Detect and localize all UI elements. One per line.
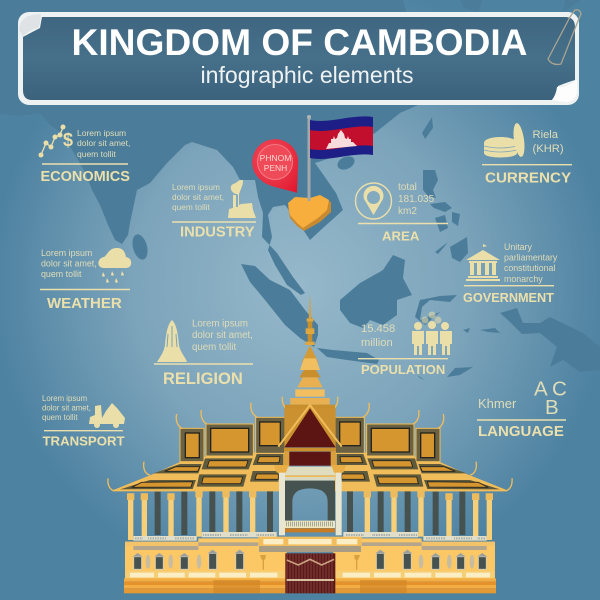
religion <box>154 318 253 388</box>
religion heading: RELIGION <box>163 370 243 388</box>
weather heading: WEATHER <box>47 295 122 312</box>
royal palace <box>108 294 512 593</box>
industry <box>172 180 256 240</box>
bottom right page curl <box>552 79 577 102</box>
population heading: POPULATION <box>361 362 445 377</box>
religion text: dolor sit amet, <box>192 330 253 341</box>
icon: letters A B C: A <box>534 378 548 400</box>
map pin: Phnom Penh <box>252 139 298 193</box>
industry text: quem tollit <box>172 202 211 212</box>
area <box>356 182 448 244</box>
title banner <box>18 10 581 105</box>
economics heading: ECONOMICS <box>40 169 130 185</box>
government text: monarchy <box>504 274 543 284</box>
government text: Unitary <box>504 242 532 252</box>
industry text: Lorem ipsum <box>172 182 220 192</box>
currency heading: CURRENCY <box>485 170 571 186</box>
population <box>358 312 452 377</box>
map of southeast asia <box>0 0 600 380</box>
economics text: dolor sit amet, <box>77 138 130 148</box>
icon: dump truck <box>89 403 125 428</box>
area text: total <box>398 182 417 193</box>
transport heading: TRANSPORT <box>42 434 125 448</box>
government text: parliamentary <box>504 252 558 262</box>
religion text: quem tollit <box>192 342 236 353</box>
map pin: Phnom Penh: PENH <box>264 163 287 173</box>
icon: letters A B C: C <box>552 378 567 400</box>
weather text: dolor sit amet, <box>41 258 97 268</box>
economics text: Lorem ipsum <box>77 128 126 138</box>
transport <box>42 394 125 448</box>
icon: coins <box>484 122 526 158</box>
currency text: (KHR) <box>532 143 564 155</box>
icon: government building <box>466 244 500 281</box>
subtitle: infographic elements <box>200 62 414 88</box>
icon: rain cloud <box>98 248 131 283</box>
weather text: quem tollit <box>41 269 82 279</box>
weather <box>40 248 131 312</box>
population text: million <box>361 337 393 349</box>
economics <box>38 124 130 185</box>
icon: group of people <box>412 312 452 355</box>
government heading: GOVERNMENT <box>463 291 554 305</box>
industry heading: INDUSTRY <box>180 224 255 240</box>
transport text: dolor sit amet, <box>42 404 91 412</box>
palace left and right wings <box>108 397 512 593</box>
currency <box>482 122 572 186</box>
transport text: Lorem ipsum <box>42 394 87 403</box>
icon: letters A B C: B <box>545 396 559 419</box>
cambodia map <box>288 195 331 231</box>
area text: km2 <box>398 206 417 217</box>
industry text: dolor sit amet, <box>172 192 224 202</box>
palace spire <box>285 294 335 409</box>
government text: constitutional <box>504 263 555 273</box>
icon: growth chart: $ <box>63 130 73 150</box>
population text: 15.458 <box>361 323 395 335</box>
religion text: Lorem ipsum <box>192 318 248 330</box>
flag of cambodia <box>307 115 373 201</box>
palace central gable and portal <box>258 405 362 593</box>
icon: location pin in circle <box>356 183 392 219</box>
top left page curl <box>19 14 41 37</box>
currency text: Riela <box>532 129 559 141</box>
government <box>463 242 558 305</box>
icon: praying hands <box>157 320 187 362</box>
area heading: AREA <box>382 228 420 244</box>
icon: factory <box>228 180 256 218</box>
title: KINGDOM OF CAMBODIA <box>72 22 528 63</box>
language text: Khmer <box>478 396 517 411</box>
transport text: quem tollit <box>42 413 78 422</box>
weather text: Lorem ipsum <box>41 248 92 258</box>
map pin: Phnom Penh: PHNOM <box>260 153 291 163</box>
economics text: quem tollit <box>77 149 116 159</box>
paper clip <box>548 10 581 64</box>
language heading: LANGUAGE <box>478 423 564 440</box>
icon: letters A B C <box>534 378 567 419</box>
language <box>477 378 567 440</box>
area text: 181.035 <box>398 194 435 205</box>
